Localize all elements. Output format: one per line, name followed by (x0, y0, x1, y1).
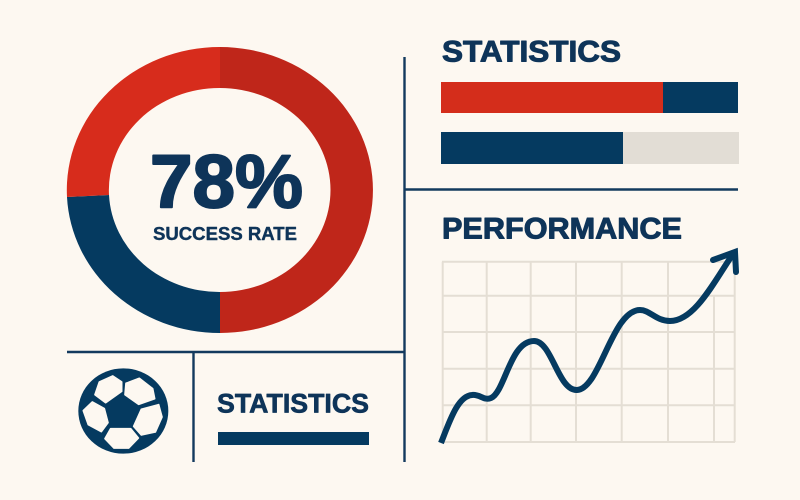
bar one (441, 82, 738, 113)
line chart (441, 252, 736, 443)
panel: bottom statistics (217, 388, 369, 445)
heading: performance: PERFORMANCE (442, 212, 682, 246)
panel: layout frame lines (67, 57, 738, 462)
panel: top statistics (441, 36, 739, 164)
heading: bottom statistics: STATISTICS (217, 388, 369, 418)
donut segment: navy (67, 195, 220, 333)
trend line (441, 254, 733, 443)
bar: bottom statistics (218, 432, 369, 445)
donut segment: bright red (67, 47, 220, 197)
icon: soccer ball (78, 368, 168, 454)
heading: top statistics: STATISTICS (442, 36, 621, 68)
donut label: SUCCESS RATE (153, 224, 297, 244)
bar two (441, 132, 739, 164)
donut segment: dark red (220, 47, 373, 333)
arrowhead (713, 252, 736, 272)
panel: success rate donut (67, 47, 373, 333)
panel: performance (441, 212, 736, 443)
donut value: 78% (150, 140, 303, 224)
